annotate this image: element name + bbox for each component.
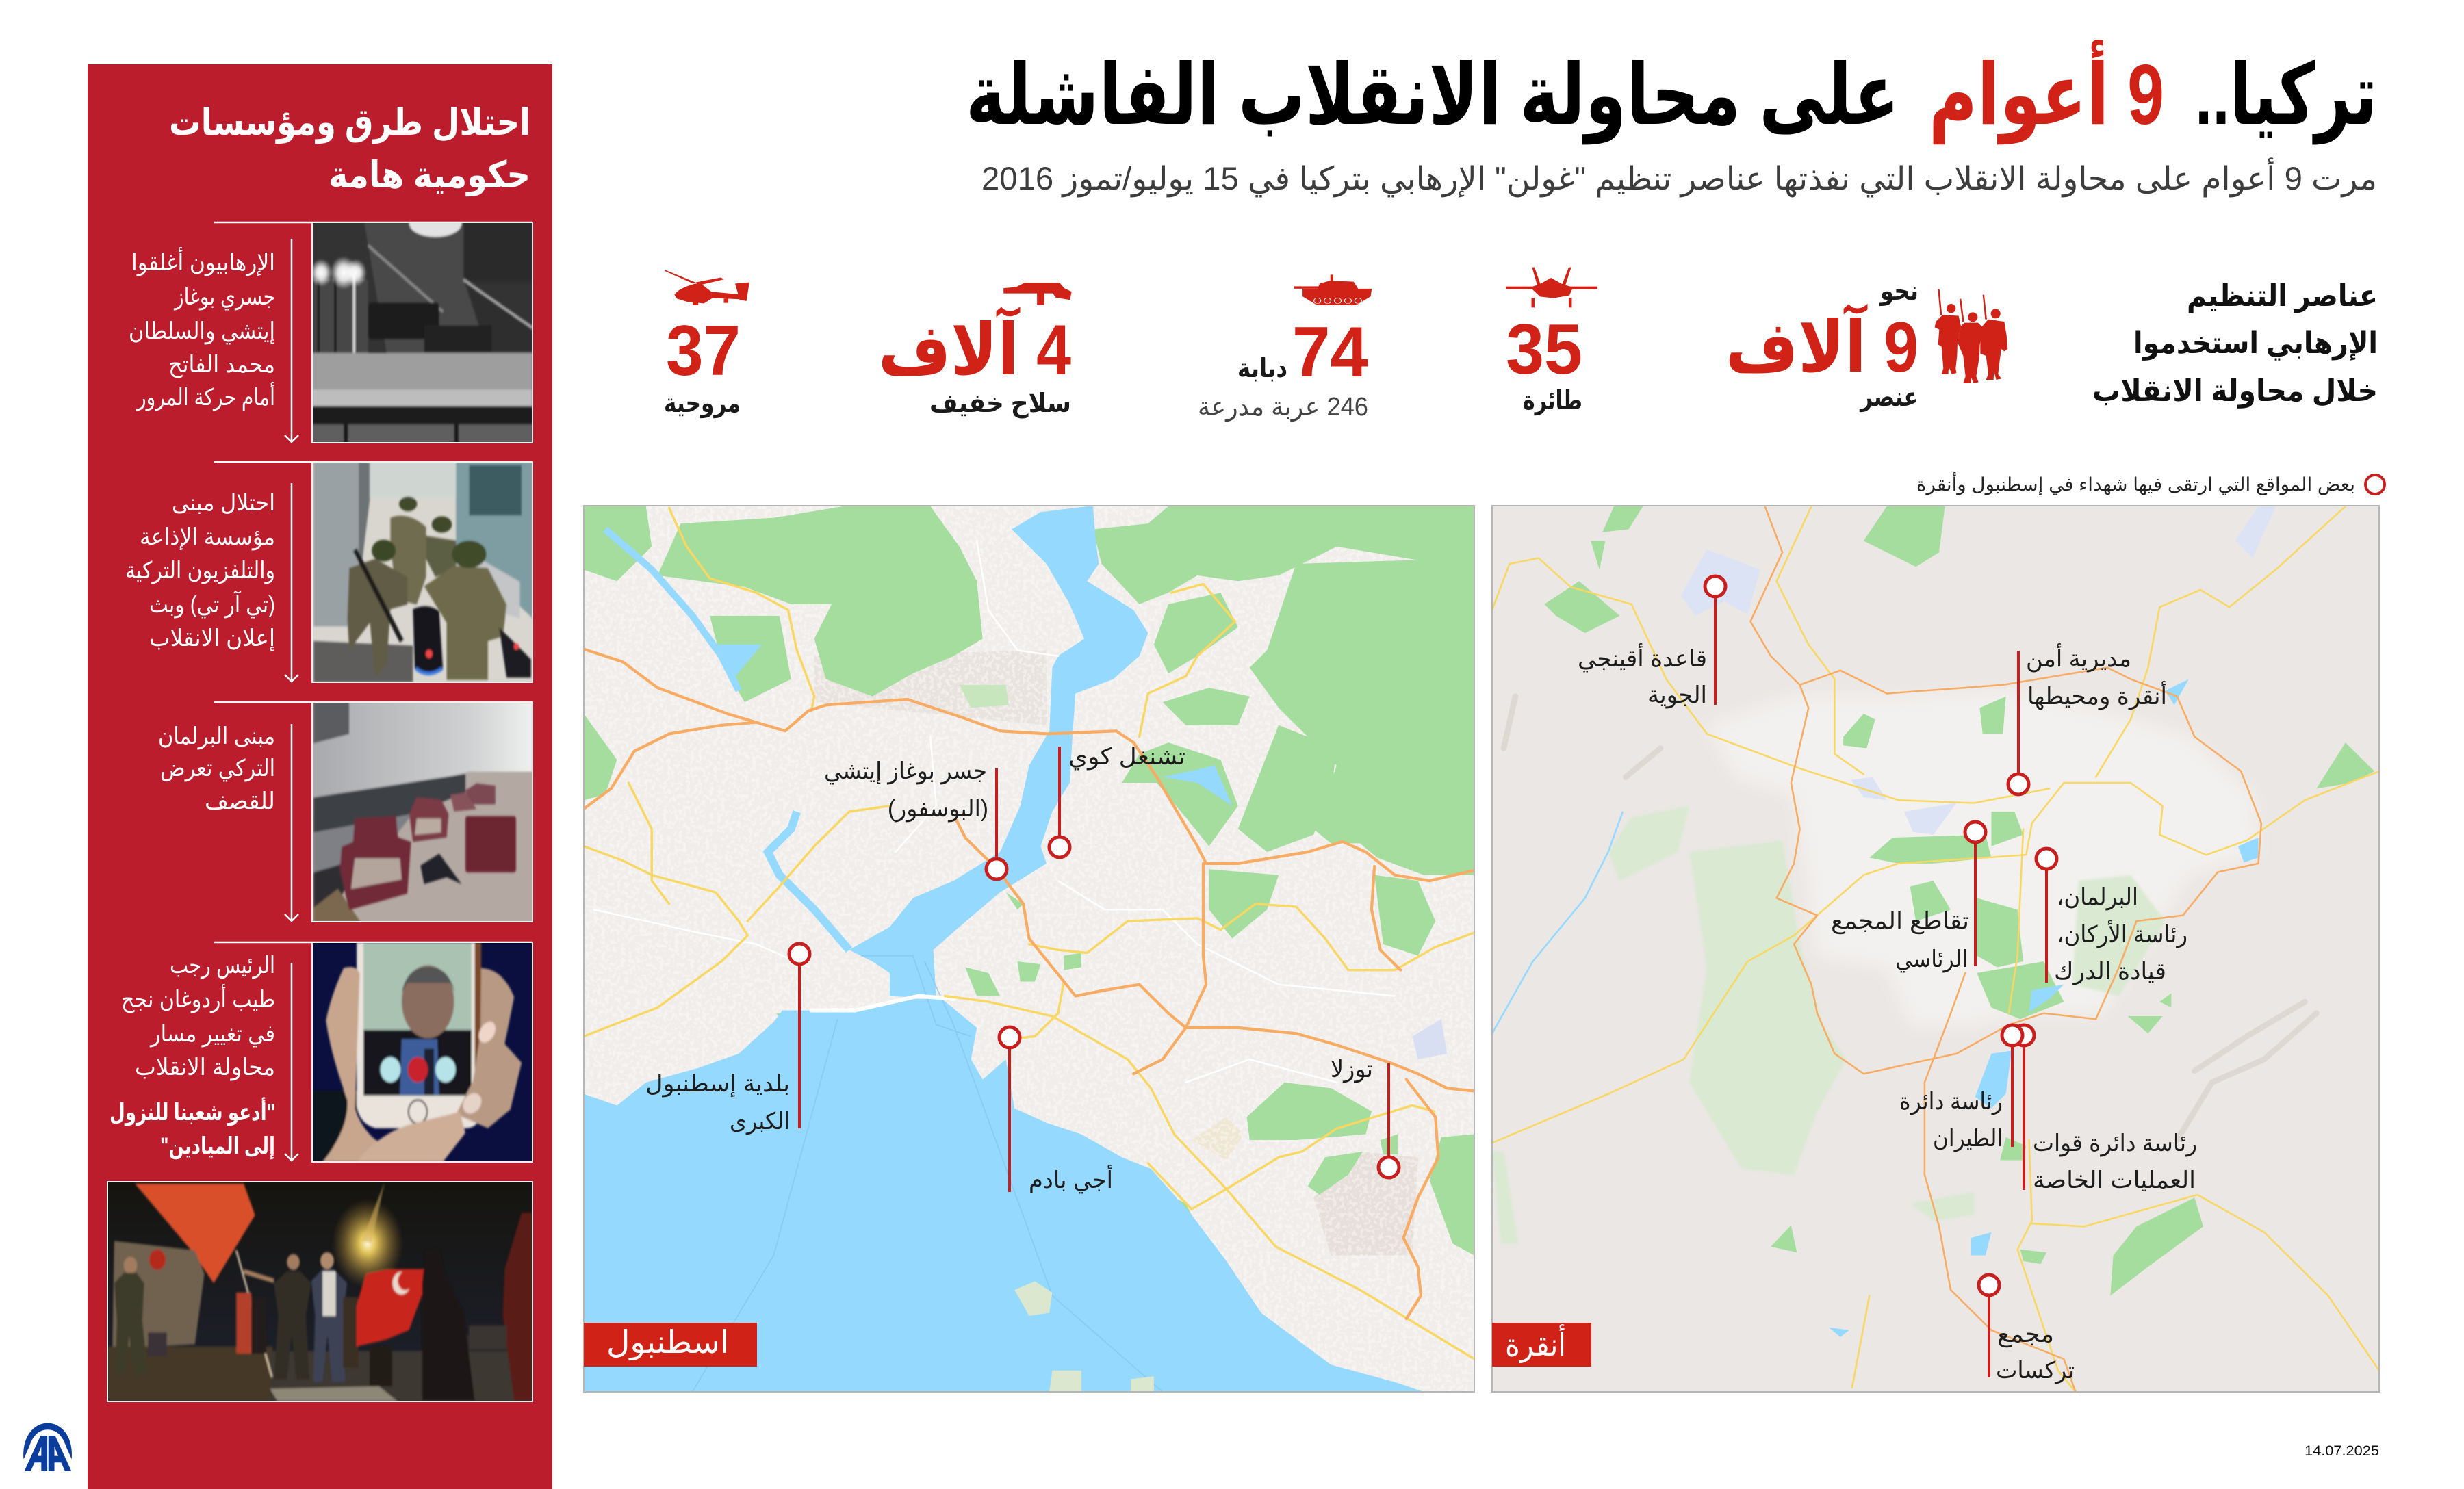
pin: parliament, general staff, gendarmerie: قيادة الدرك xyxy=(2054,959,2166,985)
photo: bombed parliament hall xyxy=(313,703,532,921)
text: إيتشي والسلطان xyxy=(129,318,275,345)
icon: tank xyxy=(1294,274,1372,305)
pin: special operations directorate xyxy=(2014,1025,2197,1193)
stats intro text: الإرهابي استخدموا xyxy=(2133,326,2378,361)
icon: rifle xyxy=(1003,283,1072,305)
pin: aviation directorate xyxy=(1899,1025,2023,1152)
text: الإرهابيون أغلقوا xyxy=(131,247,275,276)
title: ‏9 أعوام xyxy=(1929,40,2164,145)
stat: tanks: 74 xyxy=(1292,313,1368,392)
pin: Ankara police directorate: أنقرة ومحيطها xyxy=(2027,681,2167,710)
text: طيب أردوغان نجح xyxy=(121,984,275,1013)
pin: special operations directorate: العمليات الخاصة xyxy=(2033,1167,2196,1193)
sidebar heading: احتلال طرق ومؤسسات xyxy=(169,102,530,144)
pin: Acibadem xyxy=(999,1027,1113,1194)
photo: crowd with Turkish flags at night xyxy=(107,1182,532,1401)
stat: soldiers xyxy=(1725,277,2007,412)
text: محمد الفاتح xyxy=(168,352,275,378)
pin: parliament, general staff, gendarmerie: البرلمان،‏ xyxy=(2057,884,2138,911)
stat: light weapons: سلاح خفيف xyxy=(929,389,1071,418)
stat: light weapons xyxy=(878,283,1072,418)
pin: Turkes complex: مجمع xyxy=(1997,1321,2054,1347)
stat: aircraft: طائرة xyxy=(1523,387,1582,415)
stats intro text: عناصر التنظيم xyxy=(2187,279,2378,313)
pin: Istanbul municipality: بلدية إسطنبول xyxy=(645,1071,790,1098)
map base: Istanbul xyxy=(585,506,1474,1391)
pin: Istanbul municipality xyxy=(645,944,810,1135)
arrow xyxy=(285,963,298,1161)
sidebar heading xyxy=(169,102,530,196)
pin: Cengelkoy xyxy=(1049,744,1185,857)
stats intro text xyxy=(2092,279,2378,409)
pin: Cengelkoy: تشنغل كوي xyxy=(1068,744,1185,771)
pin: Bosphorus bridge: ‏(البوسفور)‏ xyxy=(888,796,988,823)
photo: president on video call xyxy=(313,943,532,1161)
stat: aircraft xyxy=(1506,268,1597,415)
text: جسري بوغاز xyxy=(173,284,275,311)
map base: Ankara xyxy=(1493,506,2378,1391)
stat: soldiers: عنصر xyxy=(1859,383,1918,412)
pin: Tuzla: توزلا xyxy=(1331,1057,1373,1083)
sidebar item 4 xyxy=(110,942,532,1162)
photo: soldiers entering broadcaster building xyxy=(313,463,532,682)
text xyxy=(110,953,275,1160)
pin: Akinci air base: الجوية xyxy=(1647,682,1707,709)
text: إلى الميادين"‏ xyxy=(160,1133,275,1160)
pin: Bosphorus bridge xyxy=(824,758,1007,879)
label: Ankara xyxy=(1492,1323,1591,1367)
text: احتلال مبنى xyxy=(172,490,275,516)
pin: Turkes complex: تركسات xyxy=(1996,1358,2075,1384)
pin: aviation directorate: رئاسة دائرة xyxy=(1899,1089,2003,1115)
icon: Anadolu Agency logo xyxy=(23,1423,72,1471)
subtitle: مرت 9 أعوام على محاولة الانقلاب التي نفذتها عناصر تنظيم "غولن" الإرهابي بتركيا في 15 يوليو/تموز 2016 xyxy=(981,157,2377,198)
text xyxy=(125,490,275,652)
text: للقصف xyxy=(205,788,275,814)
pin: Acibadem: أجي بادم xyxy=(1029,1165,1113,1194)
pin: presidential complex junction xyxy=(1831,822,1986,973)
panel: Ankara map xyxy=(1492,506,2379,1392)
text: في تغيير مسار xyxy=(149,1021,275,1048)
arrow xyxy=(285,724,298,921)
pin: Ankara police directorate xyxy=(2008,643,2167,794)
stat: soldiers: ‏9 آلاف xyxy=(1725,303,1918,387)
pin: Istanbul municipality: الكبرى xyxy=(730,1109,790,1135)
icon: jet xyxy=(1506,268,1597,307)
stat: soldiers: نحو xyxy=(1879,277,1918,306)
pin: Akinci air base xyxy=(1578,576,1725,709)
stat: tanks xyxy=(1198,274,1372,422)
pin: Turkes complex xyxy=(1979,1275,2075,1384)
pin: Ankara police directorate: مديرية أمن xyxy=(2026,643,2131,673)
stat: tanks: دبابة xyxy=(1237,354,1287,383)
pin: special operations directorate: رئاسة دائرة قوات xyxy=(2033,1130,2197,1157)
label: Ankara: أنقرة xyxy=(1505,1324,1566,1364)
text xyxy=(158,723,275,814)
text: ‏"أدعو شعبنا للنزول xyxy=(110,1097,275,1126)
text: ‏(تي آر تي) وبث xyxy=(149,591,275,619)
stat: helicopters: مروحية xyxy=(664,389,741,419)
sidebar item 2 xyxy=(125,462,532,682)
label: Istanbul xyxy=(584,1323,757,1367)
pin: presidential complex junction: تقاطع المجمع xyxy=(1831,908,1969,934)
sidebar item 3 xyxy=(158,702,532,922)
date: 14.07.2025 xyxy=(2305,1443,2379,1459)
pin: parliament, general staff, gendarmerie xyxy=(2036,849,2187,985)
arrow xyxy=(285,239,298,442)
pin: Akinci air base: قاعدة أقينجي xyxy=(1578,643,1707,673)
pin: Bosphorus bridge: جسر بوغاز إيتشي xyxy=(824,758,987,785)
text: إعلان الانقلاب xyxy=(149,625,275,652)
pin: aviation directorate: الطيران xyxy=(1933,1126,2003,1152)
text: والتلفزيون التركية xyxy=(125,558,275,584)
stat: light weapons: ‏4 آلاف xyxy=(878,306,1071,390)
pin: presidential complex junction: الرئاسي xyxy=(1895,946,1968,973)
panel: sidebar occupation of roads and institutions xyxy=(88,64,552,1489)
text: مبنى البرلمان xyxy=(158,723,275,750)
text: أمام حركة المرور xyxy=(136,382,275,411)
stats intro text: خلال محاولة الانقلاب xyxy=(2092,374,2378,409)
arrow xyxy=(285,483,298,682)
stat: aircraft: 35 xyxy=(1506,310,1582,389)
text: محاولة الانقلاب xyxy=(135,1054,275,1081)
pin: parliament, general staff, gendarmerie: رئاسة الأركان،‏ xyxy=(2057,920,2187,948)
title: على محاولة الانقلاب الفاشلة xyxy=(966,48,1899,145)
pin: Tuzla xyxy=(1331,1057,1399,1178)
label: Istanbul: اسطنبول xyxy=(606,1324,729,1361)
icon: soldiers xyxy=(1935,289,2007,383)
legend: بعض المواقع التي ارتقى فيها شهداء في إسطنبول وأنقرة xyxy=(1916,471,2355,495)
stat: helicopters xyxy=(664,270,749,419)
text: الرئيس رجب xyxy=(170,953,275,979)
icon: helicopter xyxy=(664,270,749,305)
sidebar item 1 xyxy=(129,209,532,443)
title: تركيا..‏ xyxy=(2195,48,2377,145)
stat: helicopters: 37 xyxy=(666,311,741,391)
panel: Istanbul map xyxy=(584,506,1474,1392)
sidebar heading: حكومية هامة xyxy=(329,155,530,196)
text: مؤسسة الإذاعة xyxy=(140,524,275,551)
photo: bridge closed by armoured vehicle at night xyxy=(313,223,532,442)
stat: tanks: ‏246 عربة مدرعة xyxy=(1198,393,1368,422)
text xyxy=(129,247,275,411)
text: التركي تعرض xyxy=(160,755,275,782)
